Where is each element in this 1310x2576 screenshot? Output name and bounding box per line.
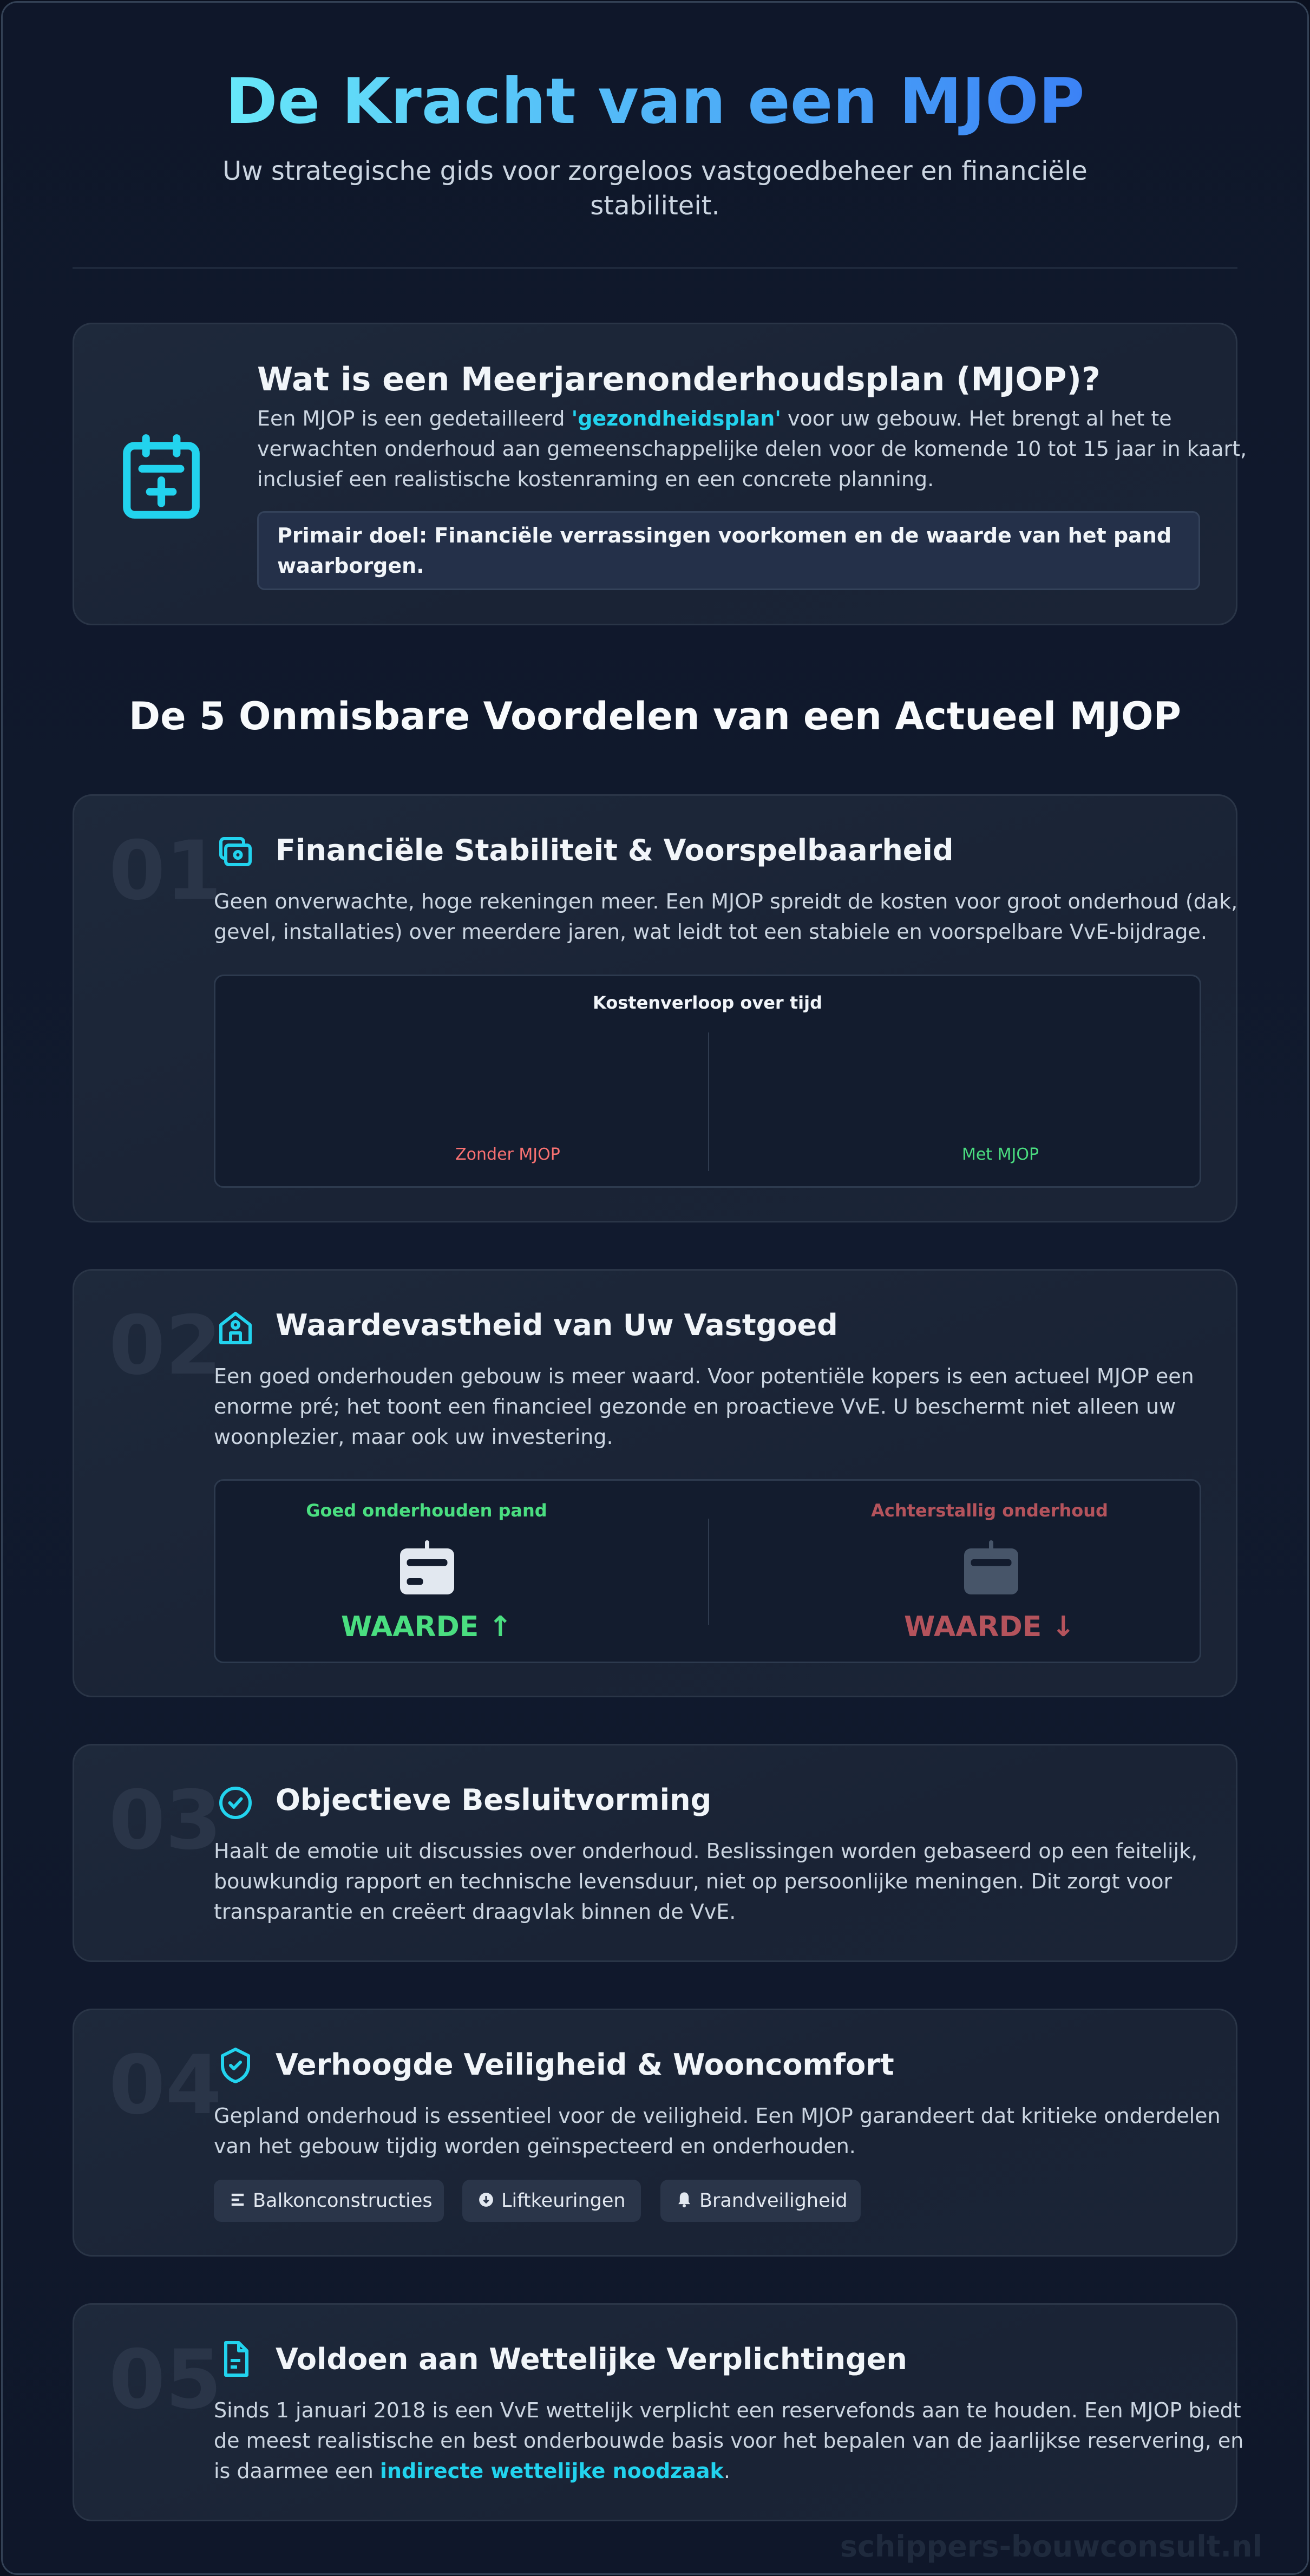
panel: 04 safety [73,2009,1237,2257]
callout: primary goal [257,511,1200,590]
label: bad: Achterstallig onderhoud [871,1500,1108,1521]
text: definition: Een MJOP is een gedetailleerd 'gezondheidsplan' voor uw gebouw. Het brengt al het te [257,407,1172,430]
text 02: woonplezier, maar ook uw investering. [214,1425,613,1449]
label: good: Goed onderhouden pand [306,1500,547,1521]
panel: what is MJOP [73,323,1237,625]
icon: house [219,1311,252,1344]
number 01: 01 [109,824,222,918]
pill: brand: Brandveiligheid [699,2190,848,2212]
pill: lift: Liftkeuringen [501,2190,626,2212]
panel: 01 financial stability [73,794,1237,1222]
text 05: is daarmee een indirecte wettelijke noodzaak. [214,2459,730,2483]
panel: 02 value [73,1269,1237,1697]
text 03 [214,1839,1197,1924]
number 04: 04 [109,2038,222,2133]
panel: 03 objective [73,1744,1237,1962]
title: De Kracht van een MJOP [225,65,1085,138]
heading 04: Verhoogde Veiligheid & Wooncomfort [276,2048,894,2082]
text 03: transparantie en creëert draagvlak binnen de VvE. [214,1900,736,1924]
text 01: Geen onverwachte, hoge rekeningen meer. Een MJOP spreidt de kosten voor groot onderhoud (dak, [214,890,1237,913]
heading 01: Financiële Stabiliteit & Voorspelbaarheid [276,833,954,867]
subtitle: Uw strategische gids voor zorgeloos vastgoedbeheer en financiële [222,156,1088,186]
label: met MJOP: Met MJOP [962,1145,1039,1164]
panel: 05 legal [73,2303,1237,2521]
value down: WAARDE ↓ [904,1611,1075,1643]
text 05: de meest realistische en best onderbouwde basis voor het bepalen van de jaarlijkse reservering, en [214,2429,1243,2453]
icon: money [219,837,252,866]
subtitle: stabiliteit. [590,191,720,221]
icon: calendar [123,434,200,519]
number 02: 02 [109,1299,222,1393]
text 02: enorme pré; het toont een financieel gezonde en proactieve VvE. U beschermt niet alleen uw [214,1395,1176,1418]
icon: shield [221,2048,250,2083]
text 02: Een goed onderhouden gebouw is meer waard. Voor potentiële kopers is een actueel MJOP een [214,1364,1194,1388]
icon: good building [400,1540,454,1594]
text 02 [214,1364,1194,1449]
pill: lift [462,2180,641,2222]
text: definition: inclusief een realistische kostenraming en een concrete planning. [257,467,934,491]
heading: 5 benefits: De 5 Onmisbare Voordelen van een Actueel MJOP [129,694,1181,738]
comparison: value [214,1479,1201,1663]
text 03: Haalt de emotie uit discussies over onderhoud. Beslissingen worden gebaseerd op een feitelijk, [214,1839,1197,1863]
heading 02: Waardevastheid van Uw Vastgoed [276,1308,838,1342]
text 05 [214,2398,1243,2483]
pill: balkon: Balkonconstructies [253,2190,433,2212]
watermark: schippers-bouwconsult.nl [840,2529,1262,2564]
subtitle [222,156,1088,221]
text 04: Gepland onderhoud is essentieel voor de veiligheid. Een MJOP garandeert dat kritieke onderdelen [214,2104,1221,2128]
number 05: 05 [109,2333,222,2427]
icon: check circle [219,1787,252,1819]
label: zonder MJOP: Zonder MJOP [455,1145,560,1164]
pill: balkon [214,2180,444,2222]
callout: primary goal: waarborgen. [277,554,424,578]
text 04: van het gebouw tijdig worden geïnspecteerd en onderhouden. [214,2134,856,2158]
heading 03: Objectieve Besluitvorming [276,1783,711,1817]
heading: what is MJOP: Wat is een Meerjarenonderhoudsplan (MJOP)? [257,361,1101,398]
text 04 [214,2104,1221,2158]
heading 05: Voldoen aan Wettelijke Verplichtingen [276,2342,907,2376]
number 03: 03 [109,1774,222,1868]
text 01 [214,890,1237,944]
text: definition [257,407,1247,491]
text 01: gevel, installaties) over meerdere jaren, wat leidt tot een stabiele en voorspelbare VvE-bijdrage. [214,920,1207,944]
chart: cost over time [214,975,1201,1188]
text 03: bouwkundig rapport en technische levensduur, niet op persoonlijke meningen. Dit zorgt voor [214,1869,1172,1893]
value up: WAARDE ↑ [341,1611,512,1643]
text: definition: verwachten onderhoud aan gemeenschappelijke delen voor de komende 10 tot 15 jaar in kaart, [257,437,1247,461]
chart title: Kostenverloop over tijd [593,992,822,1013]
callout: primary goal: Primair doel: Financiële verrassingen voorkomen en de waarde van het pand [277,524,1171,547]
text 05: Sinds 1 januari 2018 is een VvE wettelijk verplicht een reservefonds aan te houden. Een MJOP biedt [214,2398,1241,2422]
pill: brand [660,2180,861,2222]
icon: document [224,2341,248,2377]
icon: bad building [964,1540,1018,1594]
